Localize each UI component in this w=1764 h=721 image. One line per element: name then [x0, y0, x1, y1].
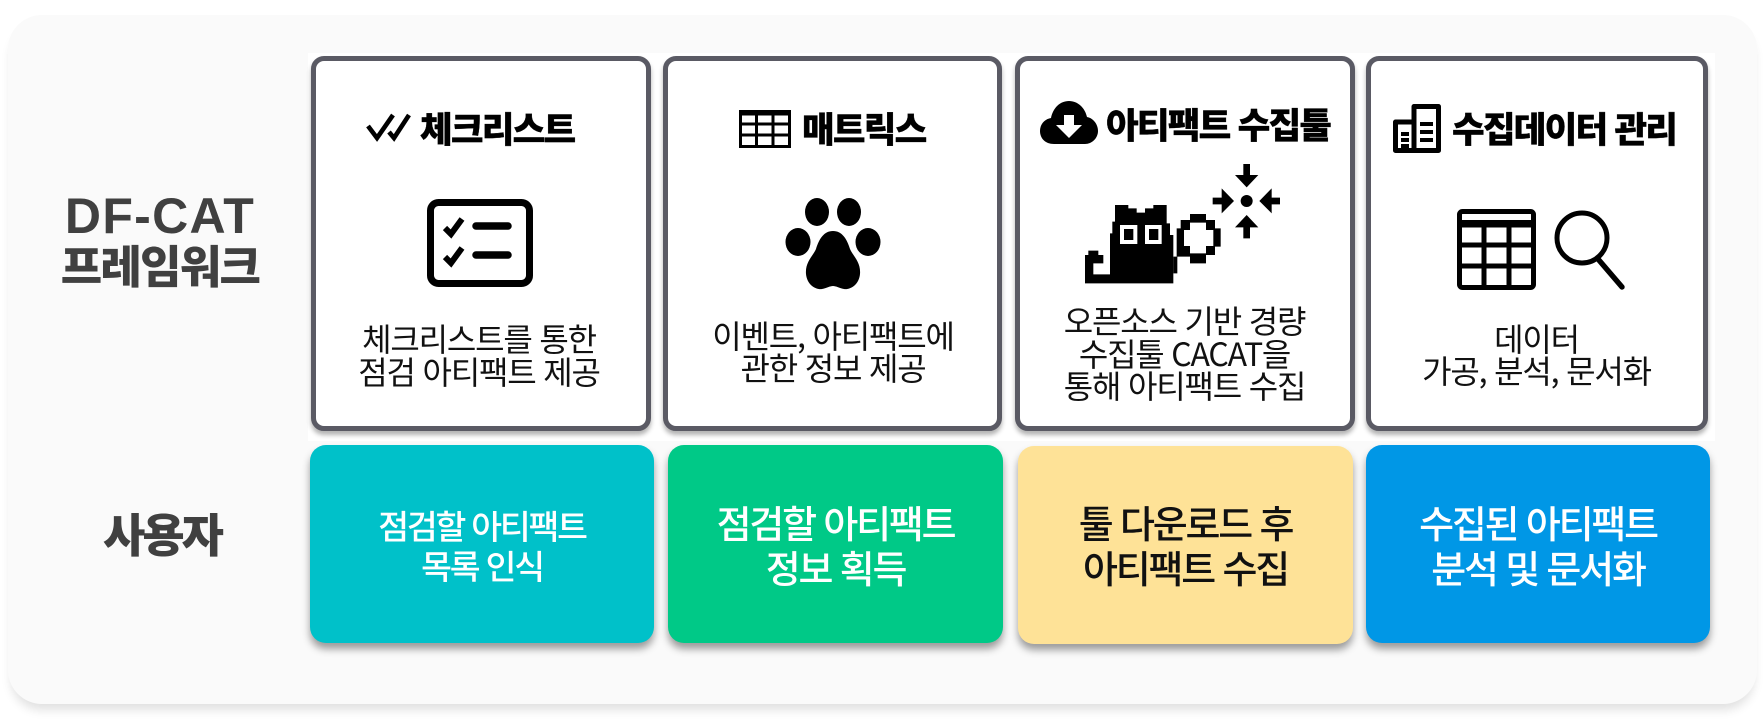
- text: collection tool description: 수집툴 CACAT을: [1079, 330, 1290, 376]
- icon: double check: [366, 114, 411, 142]
- heading: artifact collection tool: 아티팩트 수집툴: [1106, 98, 1330, 149]
- tile: download tool and collect: 아티팩트 수집: [1083, 539, 1288, 594]
- text: checklist description: 체크리스트를 통한: [362, 315, 596, 361]
- heading: checklist: 체크리스트: [420, 102, 574, 153]
- card: checklist: [311, 56, 651, 431]
- card: artifact collection tool: [1015, 56, 1355, 431]
- text: matrix description: 이벤트, 아티팩트에: [712, 312, 954, 358]
- tile: recognize artifact list: [310, 445, 654, 643]
- heading: collected data management: 수집데이터 관리: [1452, 102, 1676, 153]
- tile: download tool and collect: 툴 다운로드 후: [1079, 494, 1292, 549]
- text: data management description: 데이터: [1494, 315, 1579, 361]
- heading: user: 사용자: [103, 500, 221, 566]
- text: data management description: [1422, 315, 1652, 393]
- tile: analyze and document: 분석 및 문서화: [1431, 539, 1645, 594]
- tile: obtain artifact info: [668, 445, 1003, 643]
- heading: DF-CAT framework: 프레임워크: [61, 231, 259, 296]
- icon: paw print: [786, 198, 880, 290]
- tile: recognize artifact list: 목록 인식: [421, 540, 543, 589]
- text: matrix description: [712, 312, 954, 390]
- icon: checklist form: [427, 199, 533, 287]
- text: checklist description: 점검 아티팩트 제공: [358, 348, 600, 394]
- tile: download tool and collect: [1018, 446, 1353, 644]
- heading: DF-CAT framework: DF-CAT: [65, 188, 255, 244]
- icon: data document: [1393, 104, 1441, 153]
- heading: DF-CAT framework: [61, 188, 260, 296]
- panel: card backing: [308, 53, 1715, 441]
- icon: matrix grid: [739, 110, 791, 148]
- icon: pixel cat with target: [1085, 164, 1280, 284]
- icon: magnifier: [1554, 210, 1625, 290]
- text: matrix description: 관한 정보 제공: [741, 344, 925, 390]
- icon: data table: [1457, 209, 1536, 290]
- text: data management description: 가공, 분석, 문서화: [1422, 347, 1651, 393]
- text: collection tool description: 오픈소스 기반 경량: [1064, 297, 1305, 343]
- text: collection tool description: 통해 아티팩트 수집: [1064, 362, 1305, 408]
- tile: obtain artifact info: 정보 획득: [766, 539, 905, 594]
- card: matrix: [663, 56, 1002, 431]
- tile: recognize artifact list: 점검할 아티팩트: [378, 500, 586, 549]
- tile: analyze and document: 수집된 아티팩트: [1419, 494, 1657, 549]
- card: collected data management: [1366, 56, 1708, 431]
- tile: obtain artifact info: 점검할 아티팩트: [717, 494, 954, 549]
- heading: matrix: 매트릭스: [802, 102, 925, 153]
- icon: cloud download: [1040, 101, 1098, 144]
- tile: analyze and document: [1366, 445, 1710, 643]
- text: checklist description: [358, 315, 600, 394]
- text: collection tool description: [1064, 297, 1306, 408]
